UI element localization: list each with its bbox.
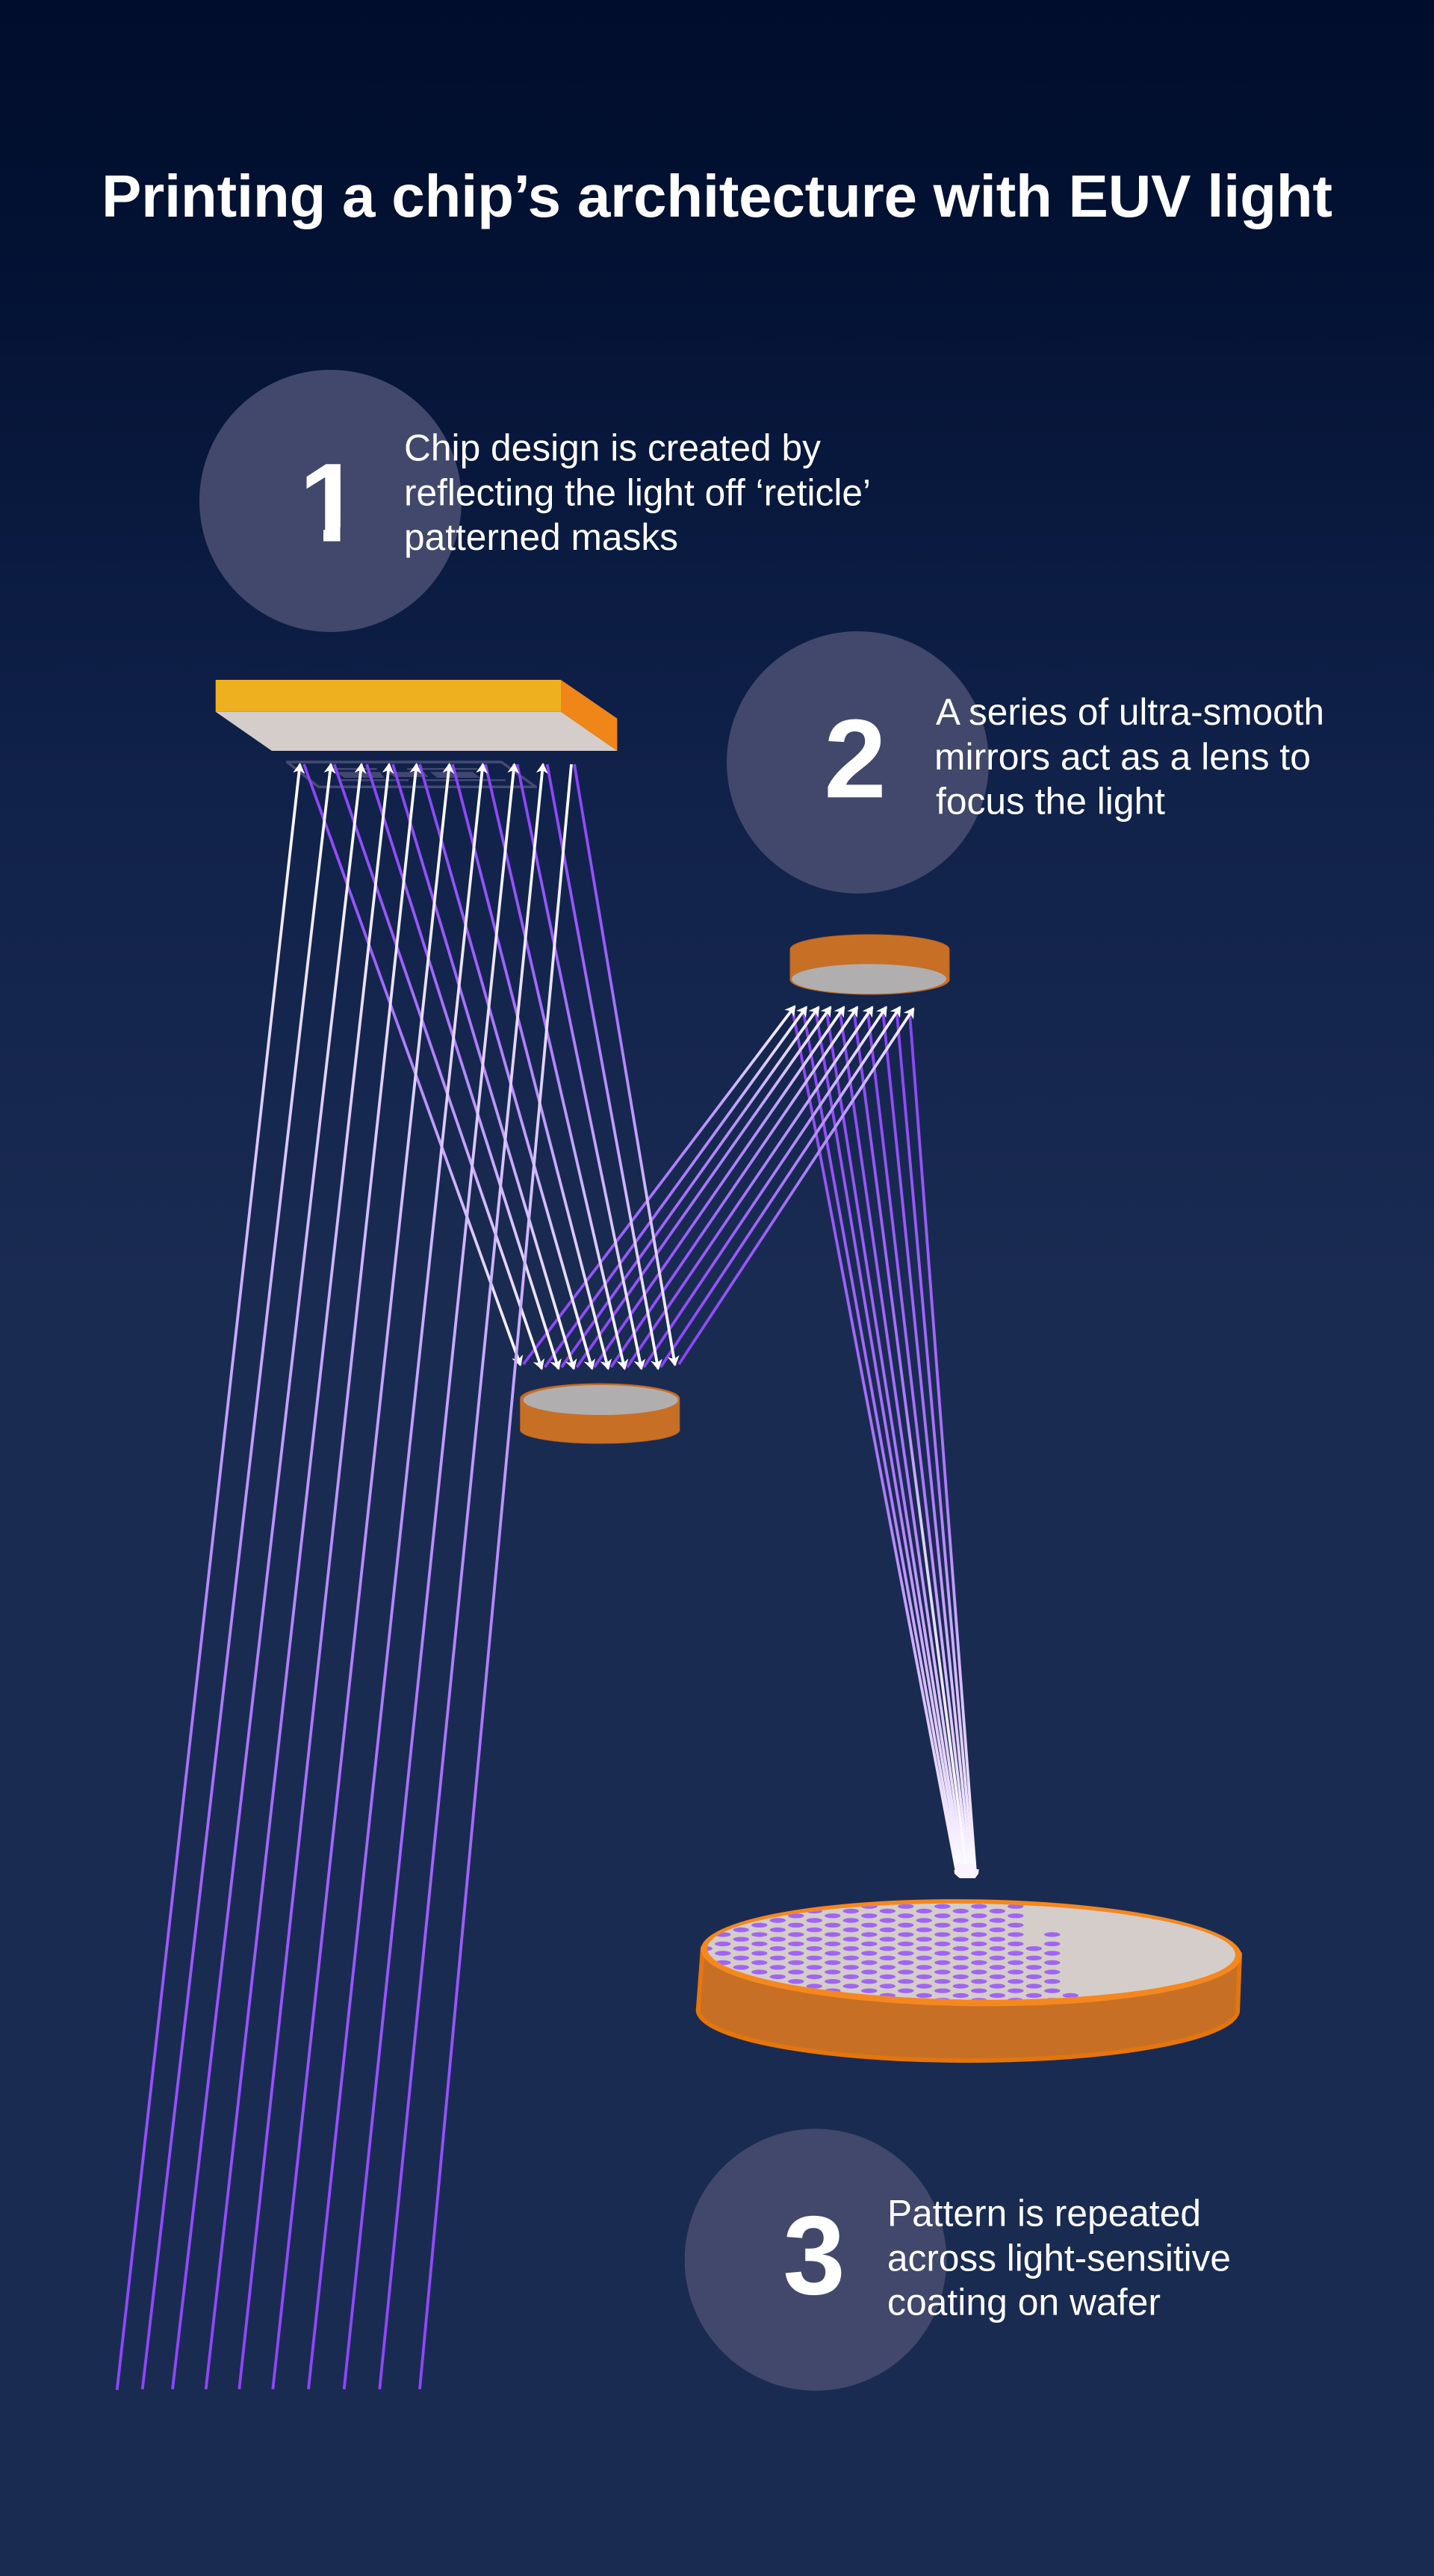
reticle side face	[561, 680, 617, 751]
wafer rim	[701, 1896, 1242, 2010]
step 2 description: A series of ultra-smooth	[936, 691, 1324, 733]
reticle reflective underside	[216, 712, 617, 751]
step 3 number: 3	[783, 2192, 845, 2318]
step 3 description: coating on wafer	[887, 2282, 1161, 2323]
reticle chip pattern	[287, 762, 536, 787]
step 1 circle	[199, 370, 462, 632]
merged arrowheads at wafer	[955, 1864, 979, 1878]
wafer	[678, 1896, 1242, 2061]
step 3 circle	[685, 2128, 946, 2391]
step 3 description: across light-sensitive	[887, 2237, 1231, 2279]
step 2 description	[934, 691, 1324, 822]
step 2 circle	[727, 631, 989, 894]
upper mirror	[790, 935, 949, 994]
light rays: upper mirror to wafer	[793, 1013, 975, 1872]
step 2 description: mirrors act as a lens to	[934, 736, 1311, 778]
reticle front face	[216, 680, 561, 712]
light rays: reticle to lower mirror	[304, 764, 675, 1369]
step 2 description: focus the light	[936, 780, 1165, 822]
title: Printing a chip’s architecture with EUV light	[102, 163, 1332, 229]
wafer body	[698, 1948, 1240, 2061]
light rays: lower mirror to upper mirror	[524, 1006, 913, 1367]
step 1 description: reflecting the light off ‘reticle’	[404, 472, 871, 514]
step 1 description: Chip design is created by	[404, 427, 821, 469]
printed chip dots	[678, 1904, 1078, 2002]
step 3 description: Pattern is repeated	[887, 2192, 1201, 2234]
step 3 description	[887, 2192, 1231, 2323]
wafer coating surface	[707, 1901, 1236, 2003]
step 2 number: 2	[824, 696, 887, 821]
step 1 number: 1	[299, 439, 361, 565]
step 1 description: patterned masks	[404, 516, 678, 558]
lower mirror	[521, 1384, 680, 1443]
light rays: incoming beam to reticle	[117, 764, 571, 2390]
step 1 description	[404, 427, 871, 558]
reticle mask block	[216, 680, 617, 751]
